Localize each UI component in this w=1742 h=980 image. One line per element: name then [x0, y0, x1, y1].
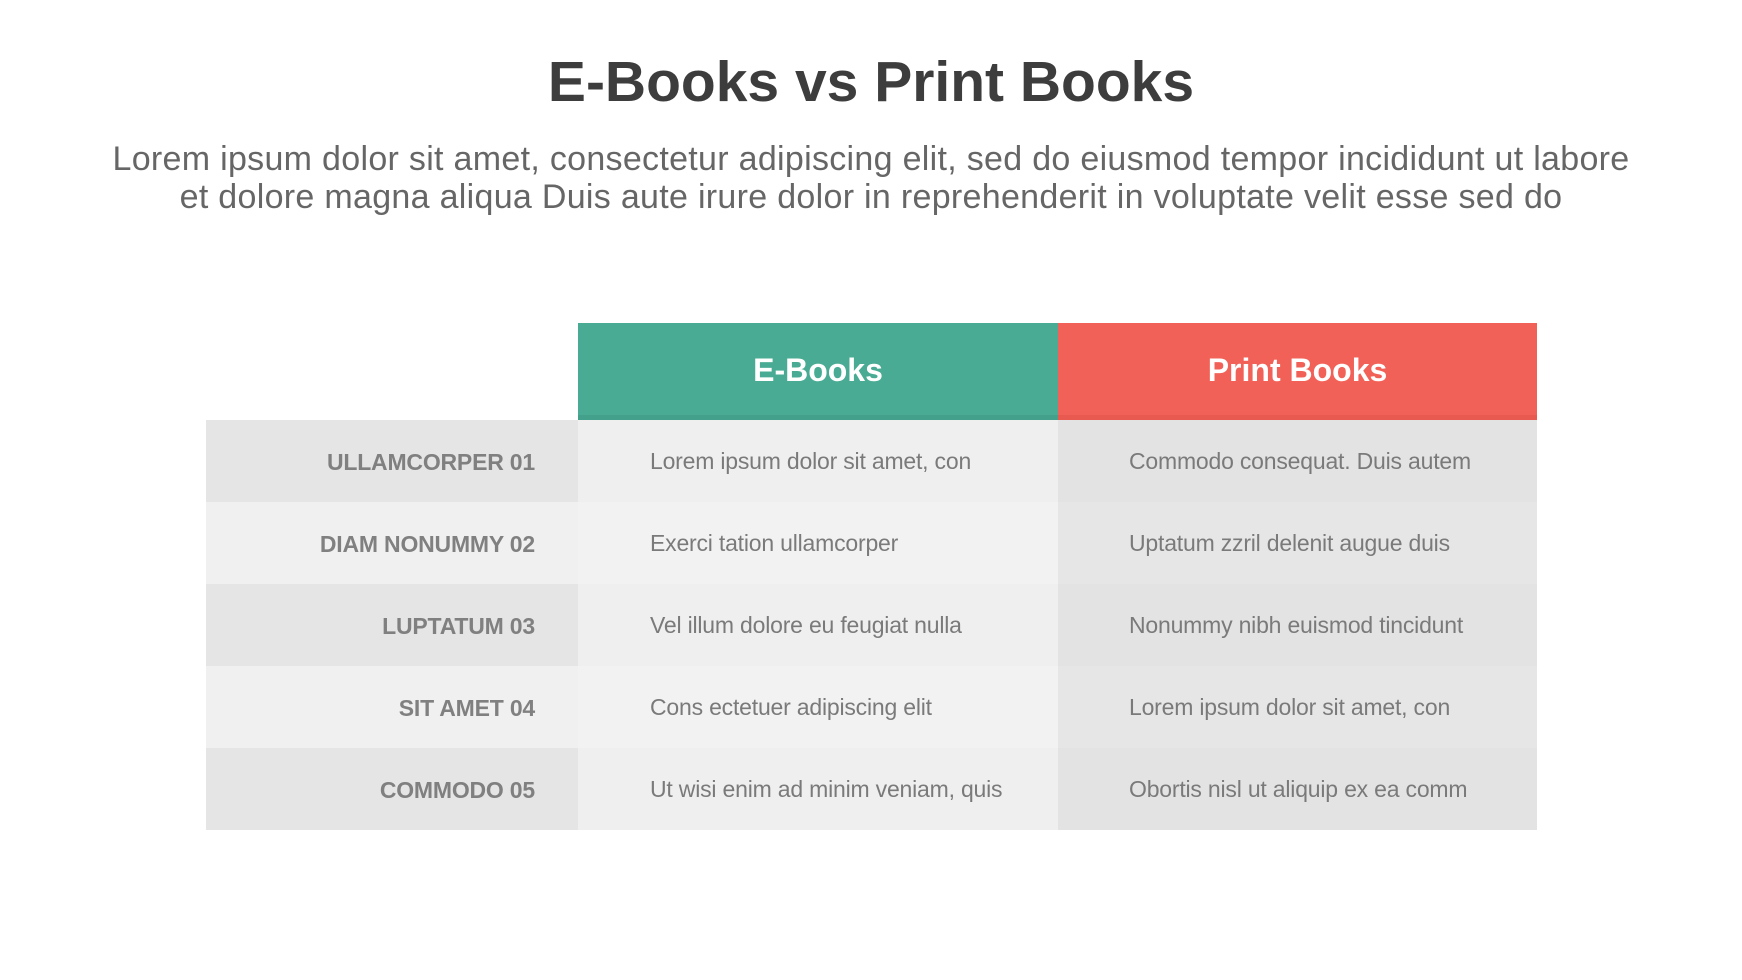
row 2: Exerci tation ullamcorper: [650, 530, 898, 556]
row 4: Cons ectetuer adipiscing elit: [650, 694, 932, 720]
row 5: Obortis nisl ut aliquip ex ea comm: [1129, 776, 1467, 802]
row 3: [206, 584, 1537, 666]
row 3: Nonummy nibh euismod tincidunt: [1129, 612, 1463, 638]
row 1: ULLAMCORPER 01: [327, 449, 535, 475]
row 2: DIAM NONUMMY 02: [320, 531, 535, 557]
subtitle: Lorem ipsum dolor sit amet, consectetur adipiscing elit, sed do eiusmod tempor incididunt ut labore: [112, 140, 1630, 178]
row 5: [206, 748, 1537, 830]
row 3: LUPTATUM 03: [382, 613, 535, 639]
subtitle: et dolore magna aliqua Duis aute irure dolor in reprehenderit in voluptate velit esse sed do: [180, 178, 1562, 216]
header: Print Books: [1058, 323, 1537, 420]
row 2: [206, 502, 1537, 584]
row 5: COMMODO 05: [380, 777, 535, 803]
header: Print Books: Print Books: [1208, 352, 1387, 388]
header: E-Books: [578, 323, 1058, 420]
row 2: Uptatum zzril delenit augue duis: [1129, 530, 1450, 556]
row 4: [206, 666, 1537, 748]
row 4: Lorem ipsum dolor sit amet, con: [1129, 694, 1450, 720]
row 4: SIT AMET 04: [399, 695, 535, 721]
row 1: Lorem ipsum dolor sit amet, con: [650, 448, 971, 474]
row 5: Ut wisi enim ad minim veniam, quis: [650, 776, 1002, 802]
title: E-Books vs Print Books: [548, 50, 1194, 114]
row 1: [206, 420, 1537, 502]
row 3: Vel illum dolore eu feugiat nulla: [650, 612, 962, 638]
row 1: Commodo consequat. Duis autem: [1129, 448, 1471, 474]
subtitle: [112, 140, 1630, 216]
header: E-Books: E-Books: [753, 352, 883, 388]
